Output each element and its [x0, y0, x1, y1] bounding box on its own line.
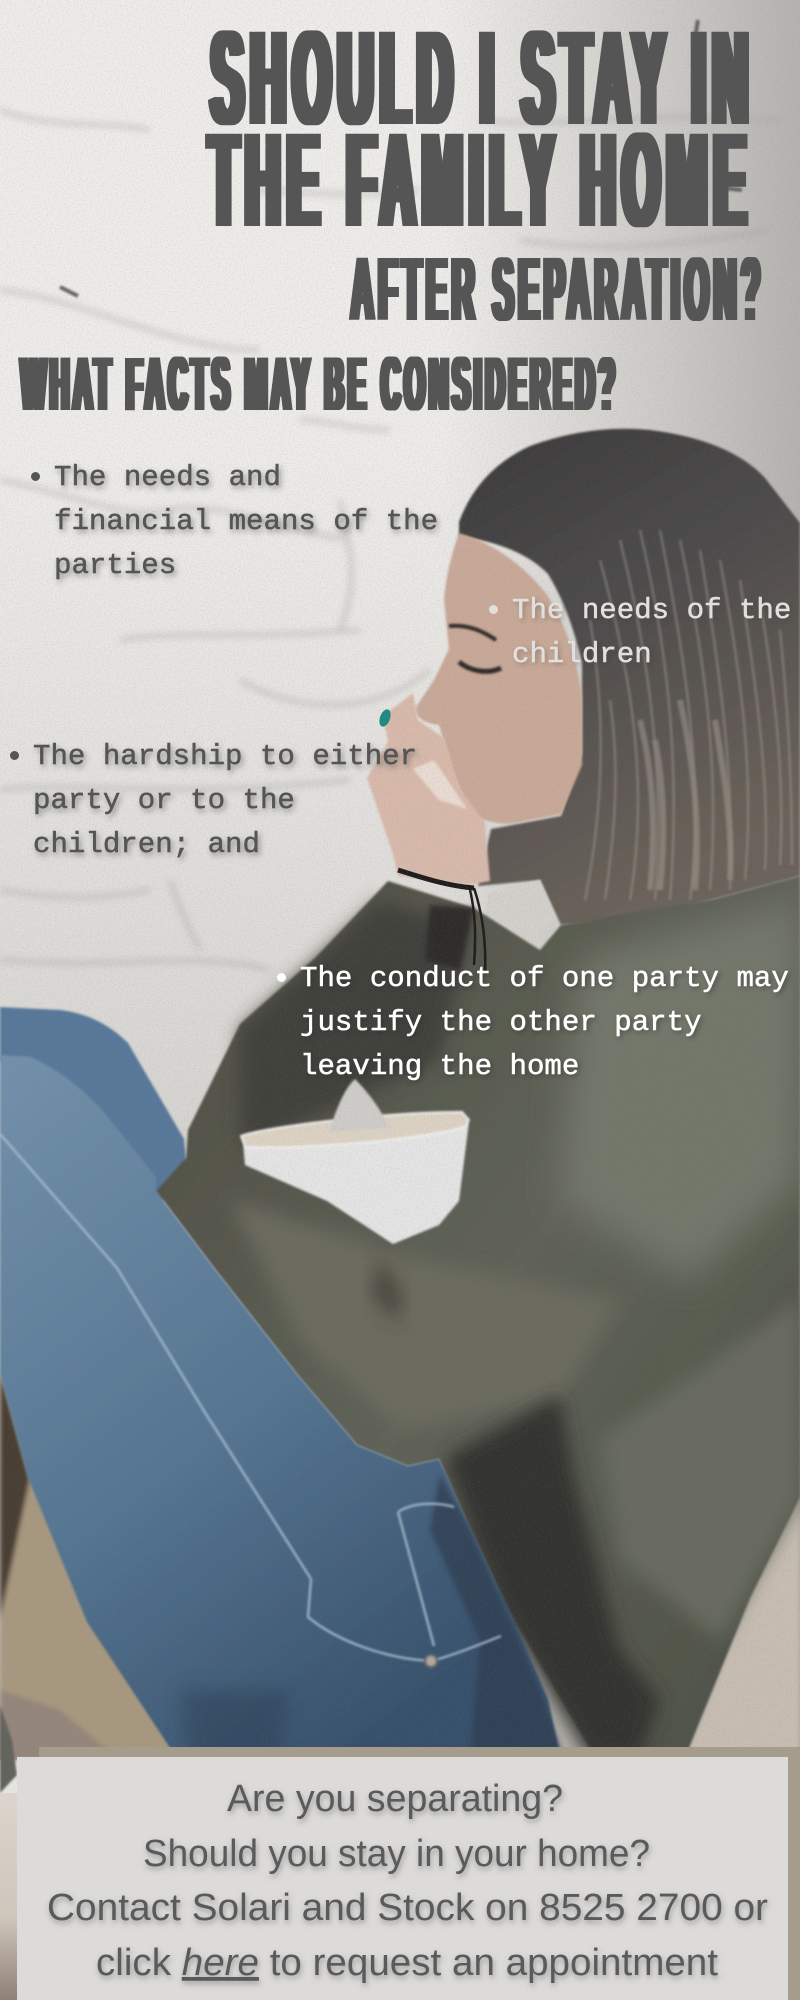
- hair strands: [585, 530, 792, 900]
- jeans shadow near waist: [430, 1475, 565, 1760]
- jeans seams, pocket and button: [0, 1134, 501, 1667]
- tan backing panel: [39, 1747, 800, 2000]
- crumpled tissue in hand: [413, 760, 467, 809]
- bullet: conduct of one party: The conduct of one party may justify the other party leaving the home: [300, 962, 789, 1083]
- teal nail: [377, 708, 393, 728]
- chair: [684, 1480, 800, 1760]
- bullet: needs and financial means: The needs and financial means of the parties: [54, 461, 438, 582]
- face: [416, 533, 582, 824]
- hand: [367, 693, 490, 885]
- left edge cloth: [0, 1705, 22, 2000]
- jeans: back leg: [0, 1007, 190, 1200]
- call to action text: Contact Solari and Stock on 8525 2700 or: [47, 1887, 768, 1929]
- wall wedge between wrist and hair: [482, 880, 556, 966]
- jeans: front leg: [0, 1055, 561, 1760]
- call to action text: Are you separating?: [227, 1778, 563, 1820]
- call to action text: [47, 1778, 768, 1984]
- sweater light and shadow folds: [230, 900, 800, 1760]
- eye and brow: [449, 626, 501, 671]
- call to action text: click here to request an appointment: [96, 1942, 718, 1984]
- sweater: [156, 876, 800, 1760]
- tissue box: [241, 1079, 469, 1244]
- bullet: hardship: The hardship to either party or to the children; and: [33, 740, 417, 861]
- bracelet: [398, 870, 485, 973]
- bullet: needs of the children: The needs of the children: [512, 594, 791, 671]
- call to action text: Should you stay in your home?: [143, 1833, 650, 1875]
- light panel: [17, 1757, 788, 2000]
- tissue: [329, 1079, 390, 1132]
- hair back: [459, 429, 800, 925]
- floor and lower wall: [0, 1370, 200, 1760]
